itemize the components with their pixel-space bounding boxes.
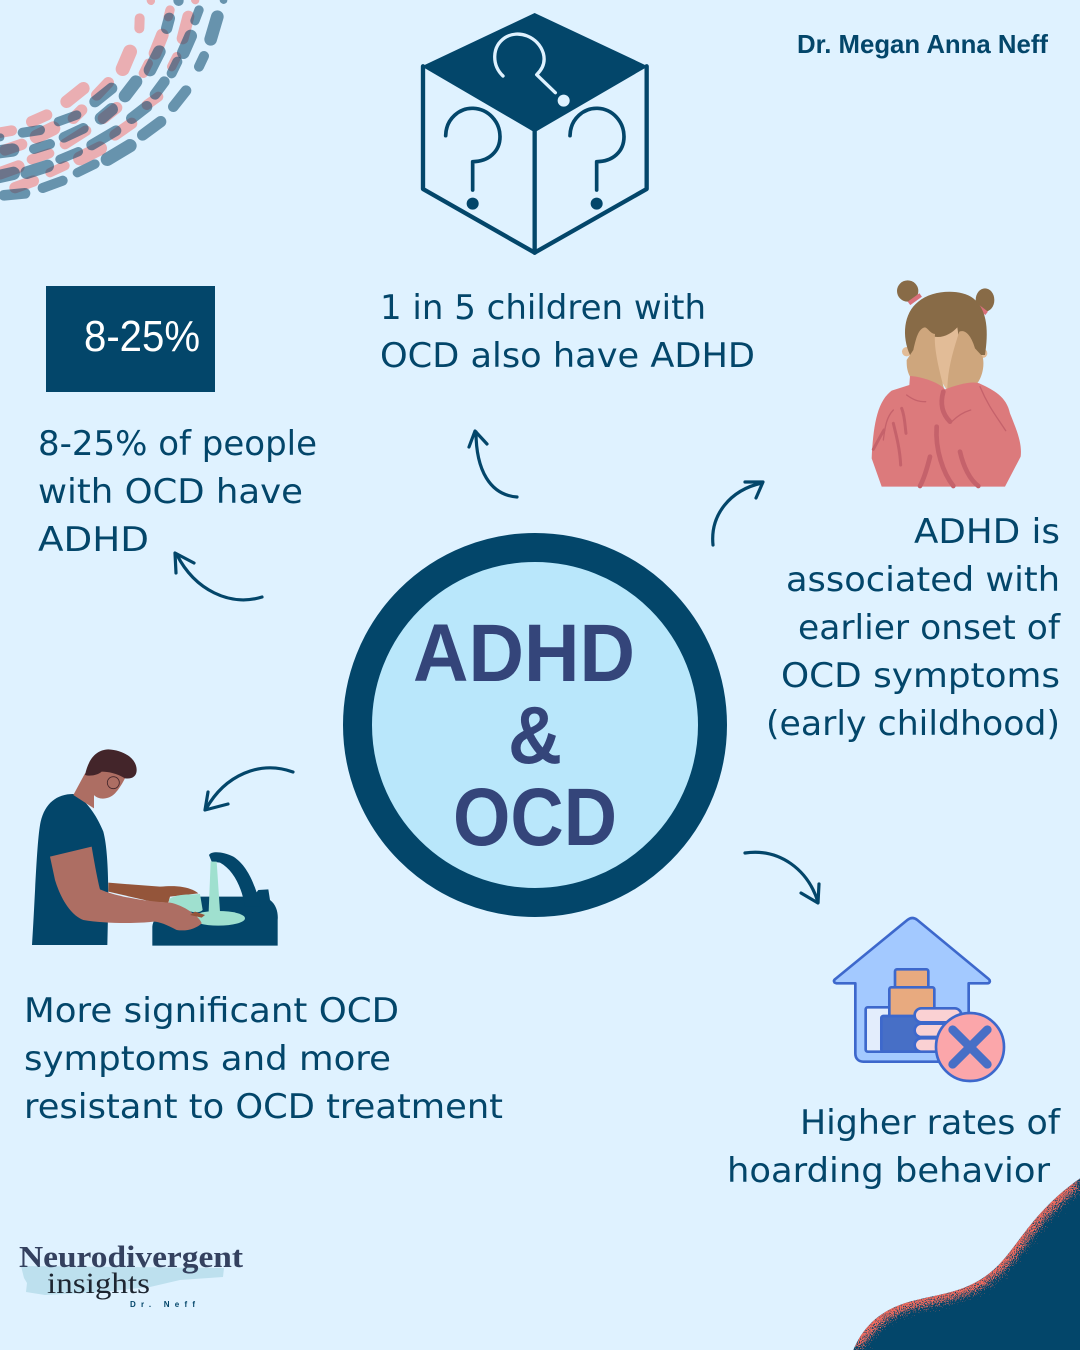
logo: Neurodivergent Insights [19, 1239, 244, 1309]
text: hoarding behavior: Higher rates of [800, 1103, 1061, 1143]
text: hoarding behavior: hoarding behavior [727, 1151, 1050, 1191]
text: 8-25% of people: 8-25% of people [38, 424, 317, 464]
logo: Neurodivergent Insights: Dr. Neff [130, 1300, 195, 1309]
decorative blob: bottom-right corner [853, 1178, 1080, 1350]
text: 1 in 5 children [380, 288, 755, 376]
logo: Neurodivergent Insights: Neurodivergent [19, 1239, 244, 1274]
arrow: up left to stat [175, 553, 262, 600]
central circle: ADHD & OCD: OCD [453, 772, 617, 863]
text: earlier onset: ADHD is [914, 512, 1060, 552]
text: 8-25% of people: with OCD have [38, 472, 303, 512]
text: more significant symptoms: More significant OCD [24, 991, 399, 1031]
text: hoarding behavior [727, 1103, 1061, 1191]
central circle: ADHD & OCD: ADHD [413, 608, 635, 699]
decorative dashes: top-left swoosh [0, 0, 224, 195]
arrow: up right to girl [713, 482, 763, 545]
arrow: left to handwashing [205, 768, 293, 810]
icon: girl covering face [872, 280, 1021, 487]
arrow: up to top text [469, 431, 517, 497]
icon: man washing hands [32, 749, 278, 946]
stat box: 8-25% [46, 286, 215, 392]
central circle: ADHD & OCD: & [508, 690, 562, 781]
text: 1 in 5 children: 1 in 5 children with [380, 288, 706, 328]
central circle: ADHD & OCD [358, 548, 712, 902]
logo: Neurodivergent Insights: insights [47, 1267, 150, 1300]
text: more significant symptoms: resistant to OCD treatment [24, 1087, 503, 1127]
text: earlier onset: associated with [786, 560, 1060, 600]
text: earlier onset: OCD symptoms [781, 656, 1060, 696]
stat box: 8-25%: 8-25% [84, 312, 200, 361]
text: 1 in 5 children: OCD also have ADHD [380, 336, 755, 376]
icon: question mark cube [422, 13, 648, 253]
arrow: down right to house [745, 852, 819, 903]
text: 8-25% of people [38, 424, 317, 560]
author name: Dr. Megan Anna Neff [797, 29, 1048, 59]
text: earlier onset [766, 512, 1061, 744]
text: 8-25% of people: ADHD [38, 520, 149, 560]
text: more significant symptoms [24, 991, 503, 1127]
icon: house with hoarded boxes [834, 918, 1004, 1081]
text: earlier onset: (early childhood) [766, 704, 1060, 744]
text: earlier onset: earlier onset of [798, 608, 1061, 648]
text: more significant symptoms: symptoms and more [24, 1039, 391, 1079]
